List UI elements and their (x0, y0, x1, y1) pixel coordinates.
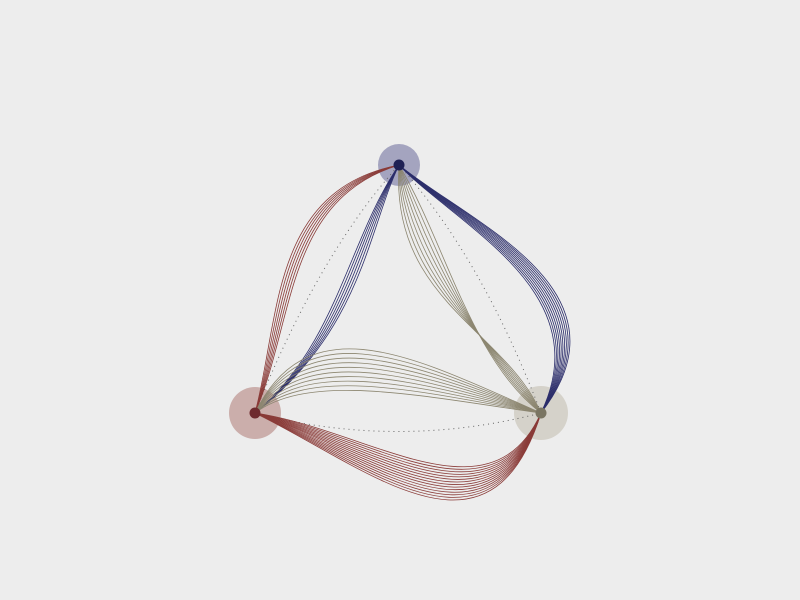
node: left red (250, 408, 260, 418)
bundle: red left to top (255, 165, 399, 413)
node: right gray (536, 408, 546, 418)
dotted arcs between nodes (255, 165, 541, 432)
node: top navy (394, 160, 404, 170)
bundle: gray top to right (398, 165, 541, 413)
bundle: navy top to left (255, 165, 399, 413)
bundle: red left to right (255, 413, 541, 500)
node halos (229, 144, 568, 440)
bundle: gray left to right (255, 349, 541, 413)
bundle: navy top to right (399, 165, 570, 413)
